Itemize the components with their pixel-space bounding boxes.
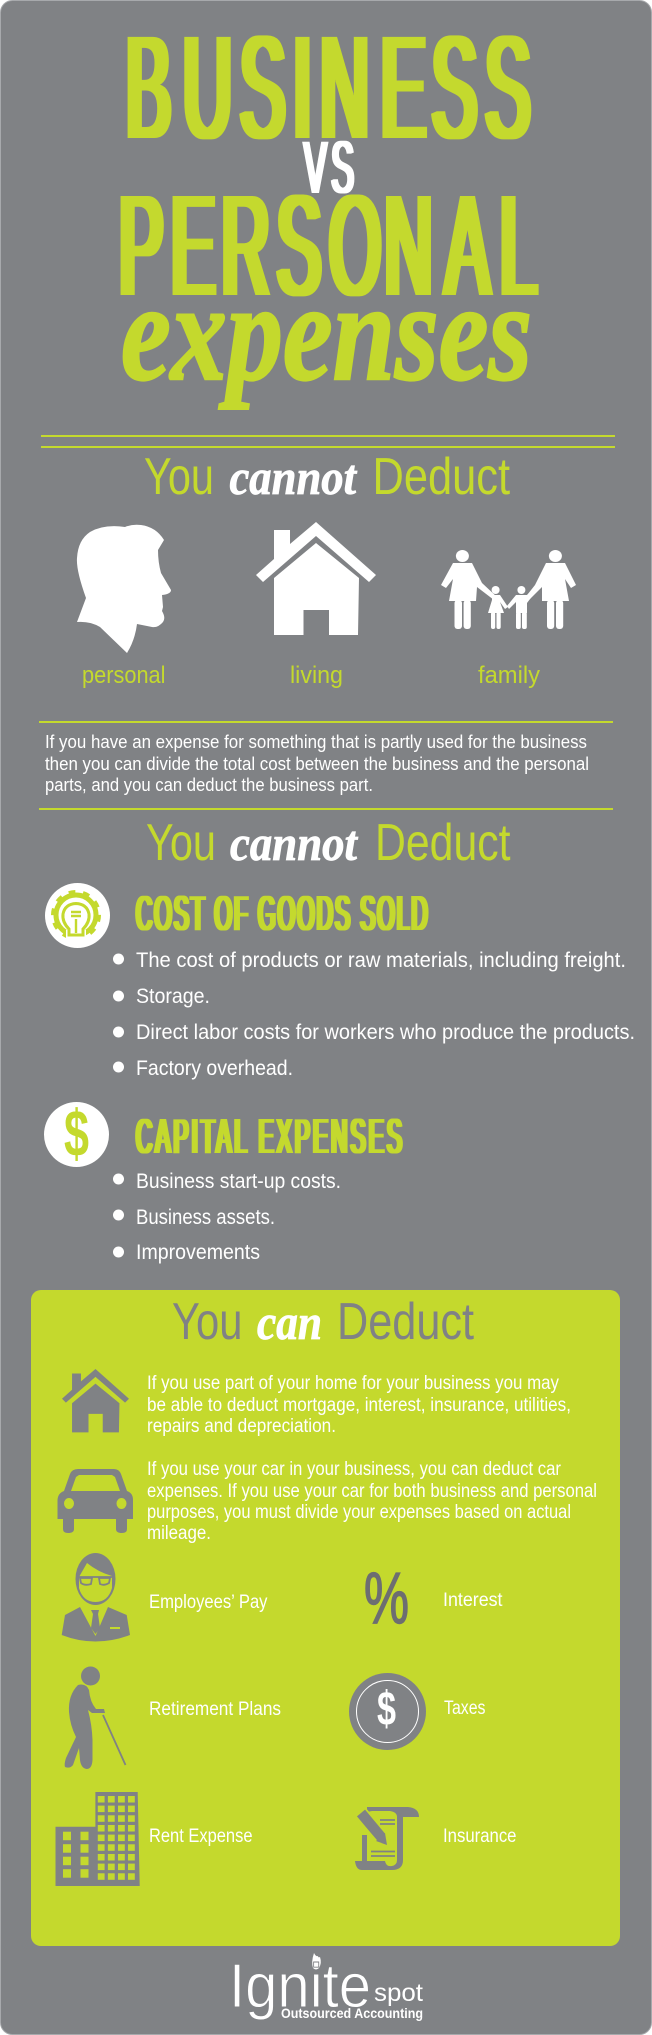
label: Interest: Interest [443,1590,503,1611]
icon: tax coin [349,1673,426,1750]
icon: building [56,1792,140,1886]
text: home deduction: repairs and depreciation. [147,1416,336,1437]
icon: car [58,1469,133,1533]
list: capital expenses: Improvements [136,1240,260,1264]
heading: You can Deduct: You [172,1293,242,1351]
heading: You cannot Deduct (first) [144,448,510,506]
logo tagline: Outsourced Accounting [281,2005,423,2021]
heading: cost of goods sold: COST OF GOODS SOLD [136,886,428,942]
text: car deduction: expenses. If you use your car for both business and personal [147,1481,597,1502]
icon: employee [62,1553,130,1642]
title [119,6,537,410]
divider [39,721,613,723]
heading: You cannot Deduct (second) [146,814,511,872]
heading: You can Deduct: can [257,1294,322,1350]
heading: You cannot Deduct (second): cannot [230,815,359,871]
icon: old man with cane [65,1666,126,1769]
text block: partly used expense: If you have an expense for something that is partly used for the business [45,731,587,752]
logo flame [312,1953,321,1970]
heading: You cannot Deduct (first): You [144,448,214,506]
icon: family [441,550,576,629]
heading: You cannot Deduct (second): You [146,814,216,872]
heading: You cannot Deduct (second): Deduct [375,814,511,872]
list: cost of goods sold: Factory overhead. [136,1056,293,1080]
text block: partly used expense [45,731,589,795]
icon: insurance document [355,1807,419,1870]
title: VS: VS [304,127,354,210]
text: home deduction: be able to deduct mortgage, interest, insurance, utilities, [147,1395,571,1416]
list: cost of goods sold: Storage. [136,984,210,1008]
text: car deduction: If you use your car in your business, you can deduct car [147,1459,562,1480]
text: car deduction: purposes, you must divide your expenses based on actual [147,1502,571,1523]
text: car deduction [147,1459,597,1544]
panel: you can deduct [31,1290,620,1946]
heading: capital expenses: CAPITAL EXPENSES [136,1109,402,1165]
text block: partly used expense: then you can divide the total cost between the business and the personal [45,753,589,774]
title: BUSINESS: BUSINESS [126,6,530,170]
label: Employees' Pay: Employees’ Pay [149,1592,268,1613]
label: Insurance: Insurance [443,1826,516,1847]
icon: house [256,522,376,635]
icon: gear with light bulb [45,883,110,948]
icon: tax coin: $ [377,1683,396,1736]
text: home deduction [147,1373,571,1437]
list: capital expenses: Business assets. [136,1205,275,1229]
label: Retirement Plans: Retirement Plans [149,1699,281,1720]
icon: home [62,1369,129,1432]
divider [39,808,613,810]
icon: dollar circle [44,1096,109,1170]
list: cost of goods sold: The cost of products or raw materials, including freight. [136,948,626,972]
text: car deduction: mileage. [147,1523,211,1544]
heading: You cannot Deduct (first): Deduct [372,448,510,506]
logo wordmark: Ignite [229,1952,371,2021]
heading: You can Deduct: Deduct [337,1293,474,1351]
title: PERSONAL: PERSONAL [119,165,537,326]
logo spot: spot [374,1979,423,2007]
label: family: family [478,662,540,689]
heading: You cannot Deduct (first): cannot [230,449,358,505]
label: Rent Expense: Rent Expense [149,1826,252,1847]
label: living: living [290,662,343,689]
title: expenses: expenses [121,255,532,410]
list: capital expenses [113,1169,341,1264]
text block: partly used expense: parts, and you can deduct the business part. [45,774,373,795]
double divider [41,435,615,448]
logo: Ignite spot [229,1952,423,2021]
heading: You can Deduct [172,1293,474,1351]
icon: personal head silhouette [77,525,171,653]
text: home deduction: If you use part of your home for your business you may [147,1373,559,1394]
icon: percent: % [364,1559,409,1639]
label: personal: personal [82,662,166,689]
list: capital expenses: Business start-up costs. [136,1169,341,1193]
icon: dollar circle: $ [64,1096,89,1170]
list: cost of goods sold [113,948,635,1080]
label: Taxes: Taxes [444,1698,486,1719]
